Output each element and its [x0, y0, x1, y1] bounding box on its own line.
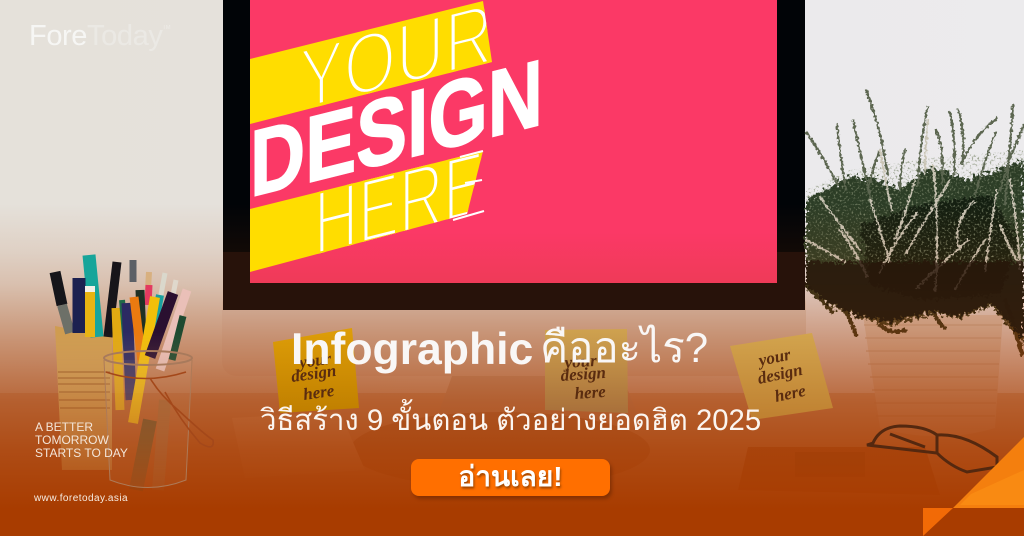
- glasses: [867, 426, 997, 472]
- subtitle: วิธีสร้าง 9 ขั้นตอน ตัวอย่างยอดฮิต 2025: [260, 404, 761, 437]
- pens: [55, 255, 187, 490]
- plant pot: [863, 315, 1003, 436]
- corner accent triangles: [923, 437, 1024, 536]
- wall: [0, 0, 1024, 400]
- title: Infographic: [291, 325, 533, 374]
- yellow band bottom: [250, 151, 483, 272]
- read-now button: [411, 459, 610, 496]
- monitor stand: [350, 376, 650, 488]
- pale flower sprigs: [806, 120, 1020, 292]
- glass jar and string: [104, 351, 213, 488]
- sticky note centre: [545, 329, 628, 413]
- monitor lower frame tint: [223, 252, 805, 310]
- papers on desk: [232, 412, 365, 478]
- sticky note centre: here: [574, 382, 607, 403]
- dark upper sprigs: [806, 90, 1024, 205]
- sticky note left: your: [296, 349, 333, 372]
- read-now button: อ่านเลย!: [458, 461, 563, 492]
- tagline: STARTS TO DAY: [35, 446, 128, 460]
- plant shadow band: [806, 262, 1024, 340]
- sticky note right: here: [773, 381, 808, 406]
- title: [291, 324, 708, 374]
- sticky note left: [273, 328, 359, 413]
- sticky note left: design: [290, 361, 337, 386]
- logo: ForeTodayTM: [29, 20, 170, 52]
- tagline: A BETTER: [35, 420, 93, 434]
- booklet on desk: [738, 447, 940, 495]
- table: [0, 393, 1024, 536]
- sticky note right: design: [756, 360, 804, 388]
- tagline: TOMORROW: [35, 433, 109, 447]
- sticky note centre: your: [562, 351, 598, 372]
- pencil cup: [55, 255, 187, 490]
- monitor frame: [223, 0, 805, 310]
- monitor screen: [250, 0, 777, 283]
- foliage speckle: [806, 150, 1024, 262]
- screen word: HERE: HERE: [314, 132, 484, 275]
- plant foliage: [806, 90, 1024, 355]
- tagline: [35, 420, 128, 460]
- sticky note right: [730, 333, 833, 420]
- screen word: DESIGN: DESIGN: [250, 40, 543, 218]
- sticky note left: here: [302, 381, 336, 404]
- title: คืออะไร?: [540, 324, 708, 371]
- monitor chin: [222, 290, 806, 376]
- sticky note centre: design: [560, 363, 607, 385]
- sticky note right: your: [755, 345, 793, 370]
- yellow band top: [250, 1, 492, 124]
- trailing dark leaves: [806, 285, 1022, 355]
- website: www.foretoday.asia: [34, 493, 128, 504]
